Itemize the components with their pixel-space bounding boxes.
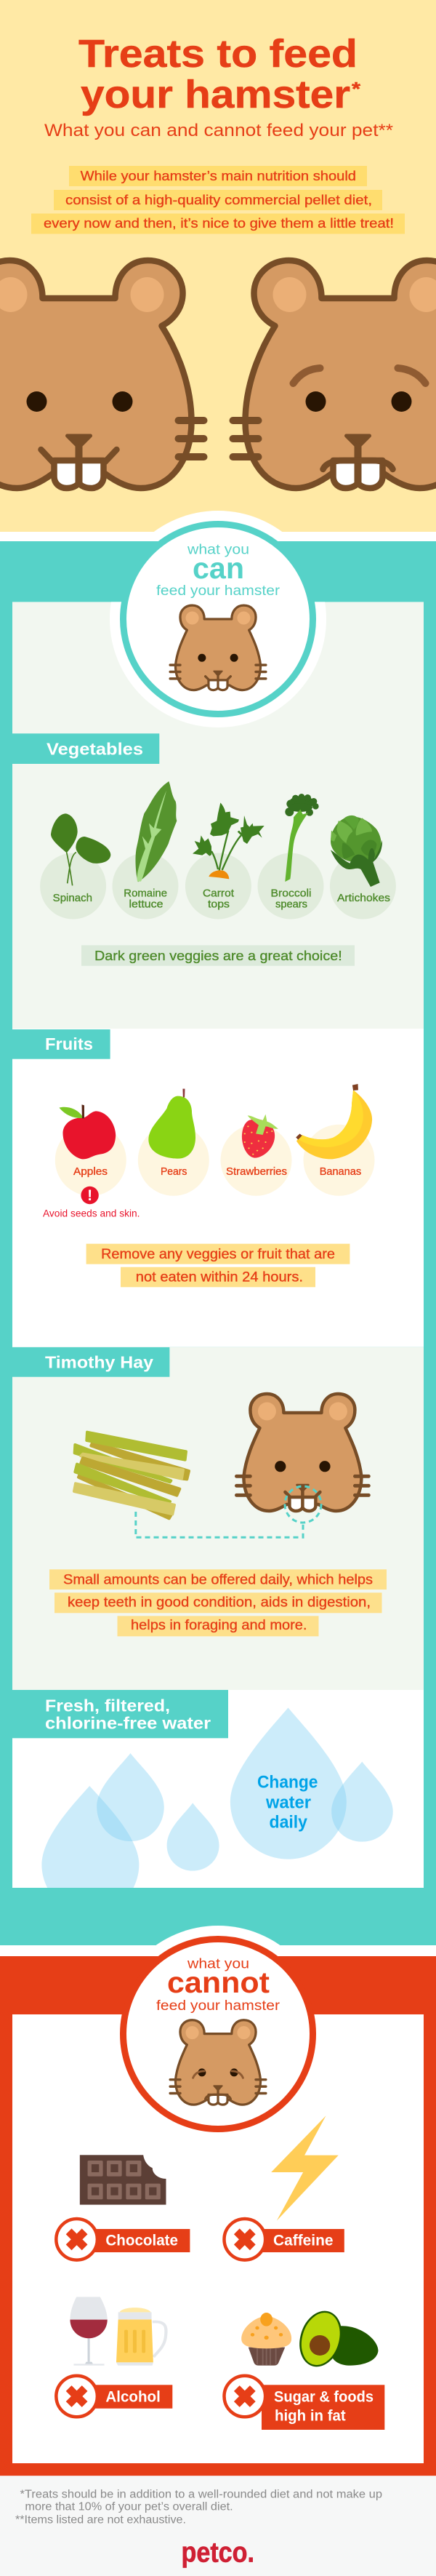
label: chocolate: [56, 2219, 190, 2260]
vegetable labels: Carrot: [203, 888, 235, 900]
callout: remove veggies or fruit: [86, 1244, 350, 1287]
intro highlighted text: consist of a high-quality commercial pellet diet,: [65, 192, 372, 207]
heading: fresh filtered water: chlorine-free water: [45, 1714, 211, 1733]
footnotes: [15, 2488, 382, 2527]
badge: what you can feed your hamster: feed your hamster: [156, 583, 280, 599]
icon: hamster eating: [236, 1394, 368, 1511]
callout: timothy hay note: [49, 1569, 387, 1636]
vegetable labels: Spinach: [53, 892, 92, 904]
callout: timothy hay note: keep teeth in good condition, aids in digestion,: [68, 1595, 371, 1611]
panel: timothy hay background: [12, 1347, 424, 1690]
panel: vegetables background: [12, 602, 424, 1029]
badge: what you cannot feed your hamster: cannot: [167, 1966, 270, 1999]
panel: orange cannot section: [0, 1956, 436, 2476]
icon: big happy hamster left: [0, 260, 203, 488]
label: sugar and foods high in fat: [224, 2376, 384, 2430]
label: caffeine: Caffeine: [273, 2233, 333, 2249]
callout: dark green veggies: [81, 945, 355, 966]
label: chocolate: Chocolate: [105, 2233, 178, 2249]
fruit labels: Strawberries: [226, 1165, 287, 1178]
icon: artichoke: [331, 816, 382, 887]
vegetable labels: Romaine: [124, 888, 167, 900]
vegetable labels: Broccoli: [270, 888, 311, 900]
callout: dark green veggies: Dark green veggies are a great choice!: [94, 948, 342, 963]
intro highlighted text: [31, 166, 405, 234]
icon: apple: [60, 1104, 116, 1159]
arrow: dashed connector from hay to mouth: [136, 1486, 321, 1537]
vegetable labels: spears: [275, 898, 307, 911]
label: caffeine: [224, 2219, 344, 2260]
panel: white band above teal section: [0, 532, 436, 541]
icon: carrot tops: [193, 802, 265, 879]
fruit circles: [55, 1125, 375, 1196]
icon: warning on apples: [81, 1187, 99, 1204]
label: sugar and foods high in fat: high in fat: [275, 2407, 346, 2424]
icon: romaine lettuce: [136, 781, 177, 882]
fruit labels: Apples: [73, 1165, 108, 1178]
title: Treats to feed: [78, 32, 358, 76]
badge: what you cannot feed your hamster: what you: [187, 1957, 249, 1972]
icon: spinach: [51, 813, 110, 885]
heading: vegetables: Vegetables: [47, 740, 143, 759]
icon: muffin and avocado: [241, 2308, 378, 2369]
panel: teal can section: [0, 541, 436, 1945]
text: change water daily: [257, 1772, 318, 1833]
logo: petco: petco.: [182, 2537, 254, 2569]
icon: strawberry: [242, 1114, 278, 1158]
callout: timothy hay note: helps in foraging and more.: [131, 1618, 307, 1633]
heading: timothy hay: [12, 1347, 169, 1377]
vegetable labels: lettuce: [129, 898, 163, 911]
vegetable labels: [53, 888, 390, 911]
badge: what you cannot feed your hamster: [124, 1939, 312, 2129]
badge: what you can feed your hamster: can: [193, 551, 244, 585]
warning text: Avoid seeds and skin.: [43, 1207, 140, 1219]
footnotes: *Treats should be in addition to a well-rounded diet and not make up: [20, 2488, 382, 2500]
heading: fresh filtered water: [12, 1690, 228, 1738]
badge: halo above orange section: [110, 1926, 326, 2142]
subtitle: What you can and cannot feed your pet**: [44, 121, 393, 140]
vegetable labels: tops: [208, 898, 230, 911]
icon: lightning bolt: [271, 2116, 339, 2221]
panel: yellow header background: [0, 0, 436, 532]
panel: cannot background: [12, 2014, 424, 2463]
icon: pear: [148, 1089, 195, 1159]
fruit labels: [73, 1165, 361, 1178]
text: change water daily: Change: [257, 1772, 318, 1792]
intro highlighted text: While your hamster’s main nutrition should: [81, 168, 356, 183]
heading: timothy hay: Timothy Hay: [45, 1353, 153, 1372]
panel: fruits background: [12, 1029, 424, 1347]
heading: vegetables: [12, 733, 159, 764]
footnotes: more that 10% of your pet’s overall diet.: [25, 2501, 233, 2513]
panel: white band above orange section: [0, 1945, 436, 1956]
title: *: [352, 78, 361, 100]
title: [78, 32, 361, 116]
title: your hamster: [81, 73, 350, 116]
panel: water background: [12, 1690, 424, 1888]
callout: timothy hay note: Small amounts can be offered daily, which helps: [63, 1572, 373, 1587]
heading: fruits: Fruits: [45, 1034, 93, 1053]
icon: warning on apples: !: [87, 1187, 92, 1204]
vegetable labels: Artichokes: [337, 892, 390, 904]
vegetable circles: [40, 853, 396, 920]
fruit labels: Bananas: [320, 1165, 361, 1178]
badge: what you can feed your hamster: [0, 511, 436, 727]
callout: remove veggies or fruit: not eaten within 24 hours.: [136, 1270, 303, 1285]
label: alcohol: Alcohol: [105, 2389, 161, 2406]
icon: wine glass and beer: [70, 2297, 166, 2366]
icon: banana: [296, 1084, 372, 1159]
label: sugar and foods high in fat: Sugar & foods: [274, 2389, 374, 2406]
text: change water daily: water: [265, 1793, 311, 1812]
intro highlighted text: every now and then, it’s nice to give them a little treat!: [44, 215, 394, 231]
badge: what you can feed your hamster: what you: [187, 543, 249, 558]
footnotes: **Items listed are not exhaustive.: [15, 2514, 186, 2527]
badge: what you cannot feed your hamster: feed your hamster: [156, 1998, 280, 2014]
heading: fruits: [12, 1029, 110, 1059]
heading: fresh filtered water: Fresh, filtered,: [45, 1696, 170, 1715]
callout: remove veggies or fruit: Remove any veggies or fruit that are: [101, 1247, 335, 1262]
icon: timothy hay: [74, 1432, 189, 1518]
icon: chocolate bar: [80, 2155, 166, 2205]
icon: water drops: [41, 1708, 393, 1888]
label: alcohol: [56, 2376, 172, 2417]
icon: broccoli spear: [285, 794, 319, 882]
panel: footer background: [0, 2476, 436, 2576]
icon: big worried hamster right: [233, 260, 436, 488]
fruit labels: Pears: [161, 1165, 187, 1178]
text: change water daily: daily: [269, 1813, 308, 1833]
